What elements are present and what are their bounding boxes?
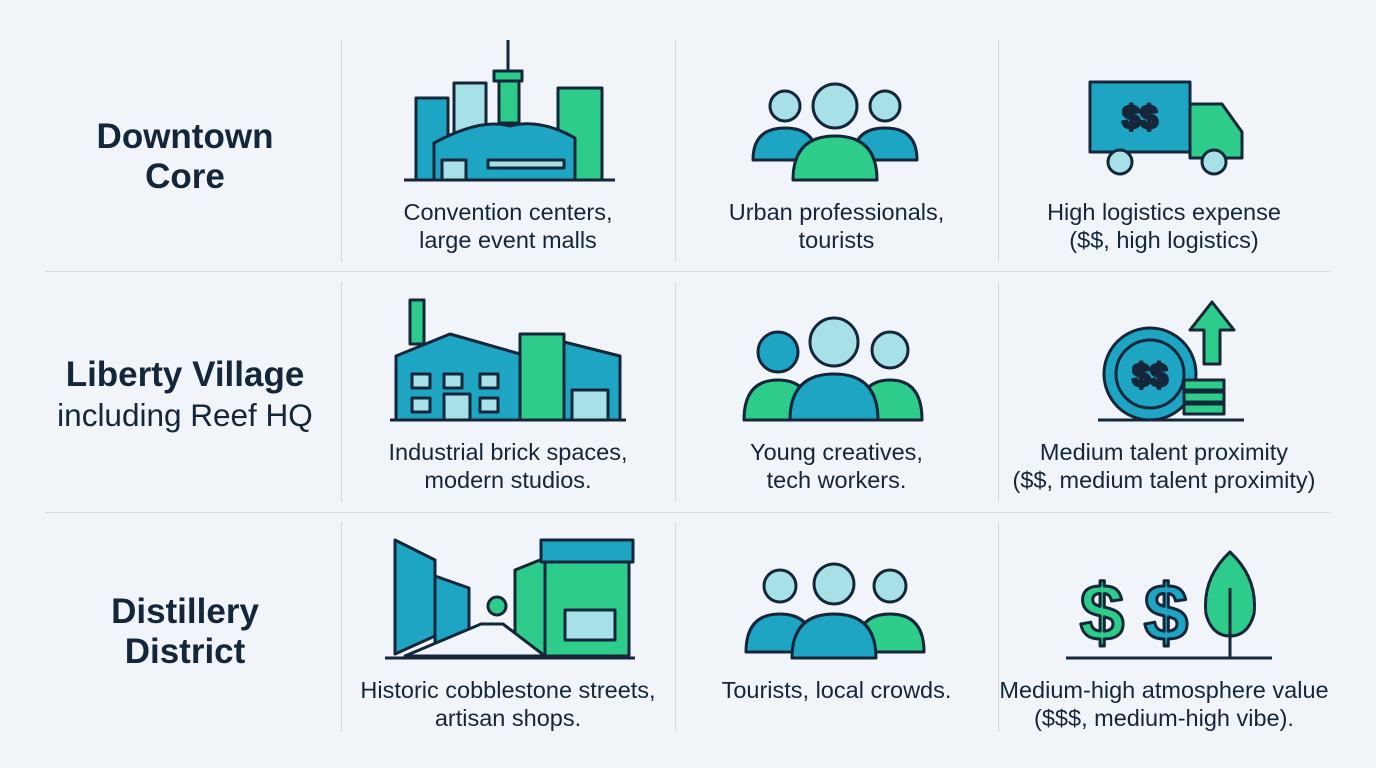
- text: industrial: modern studios.: [424, 467, 592, 493]
- text: high logistics: High logistics expense: [1047, 199, 1281, 225]
- text: medium talent: [1012, 439, 1316, 493]
- row label: Downtown Core: [97, 117, 273, 196]
- text: medium talent: ($$, medium talent proximity): [1012, 467, 1316, 493]
- text: industrial: Industrial brick spaces,: [388, 439, 628, 465]
- text: medium-high: ($$$, medium-high vibe).: [1034, 705, 1294, 731]
- icon: coins with arrow: [1098, 300, 1244, 422]
- icon: dollars and tree: $: [1144, 568, 1188, 657]
- text: convention centers: [403, 199, 612, 253]
- text: young creatives: tech workers.: [767, 467, 906, 493]
- row label: Distillery District: [111, 592, 259, 671]
- row label: Distillery District: District: [125, 632, 245, 671]
- text: convention centers: large event malls: [419, 227, 597, 253]
- text: industrial: [388, 439, 628, 493]
- text: medium-high: Medium-high atmosphere value: [999, 677, 1329, 703]
- icon: urban professionals: [752, 82, 918, 182]
- text: historic: [360, 677, 656, 731]
- text: tourists local: Tourists, local crowds.: [722, 677, 951, 703]
- text: young creatives: [750, 439, 923, 493]
- icon: dollars and tree: [1066, 550, 1272, 660]
- text: high logistics: [1047, 199, 1281, 253]
- icon: historic street: [385, 538, 635, 660]
- row label: Downtown Core: Core: [145, 157, 225, 196]
- text: historic: artisan shops.: [435, 705, 581, 731]
- row label: Downtown Core: Downtown: [97, 117, 273, 156]
- text: historic: Historic cobblestone streets,: [360, 677, 656, 703]
- text: medium talent: Medium talent proximity: [1040, 439, 1288, 465]
- text: medium-high: [999, 677, 1329, 731]
- icon: delivery truck: [1088, 80, 1244, 176]
- icon: dollars and tree: $: [1080, 568, 1124, 657]
- icon: delivery truck: $$: [1122, 99, 1158, 135]
- text: young creatives: Young creatives,: [750, 439, 923, 465]
- text: urban professionals: tourists: [799, 227, 874, 253]
- row label: Liberty Village: including Reef HQ: [57, 397, 313, 433]
- icon: tourists crowd: [744, 562, 926, 660]
- text: urban professionals: [729, 199, 944, 253]
- row label: Distillery District: Distillery: [111, 592, 259, 631]
- text: high logistics: ($$, high logistics): [1069, 227, 1259, 253]
- row label: Liberty Village: [57, 355, 313, 433]
- icon: industrial buildings: [390, 298, 626, 422]
- icon: coins with arrow: $$: [1132, 357, 1168, 393]
- icon: young creatives: [742, 316, 924, 422]
- text: convention centers: Convention centers,: [403, 199, 612, 225]
- row label: Liberty Village: Liberty Village: [66, 355, 304, 394]
- icon: city skyline: [404, 40, 615, 182]
- text: urban professionals: Urban professionals,: [729, 199, 944, 225]
